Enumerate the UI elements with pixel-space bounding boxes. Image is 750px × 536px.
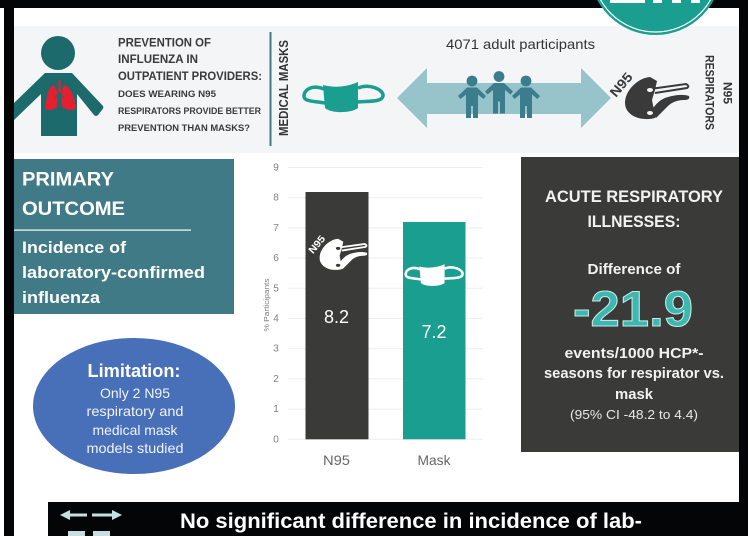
callout: limitation ellipse: models studied	[86, 440, 184, 456]
icon: medical mask	[304, 82, 383, 112]
panel: acute respiratory illnesses: ACUTE RESPIRATORY	[545, 188, 723, 206]
bar chart: percent participants: 5	[273, 283, 279, 294]
bar: mask	[403, 222, 466, 439]
panel: primary outcome	[14, 159, 234, 314]
text: outcome description	[22, 238, 205, 307]
text: outcome description: Incidence of	[22, 238, 126, 257]
icon: white N95 on bar	[307, 233, 367, 270]
heading: study question: PREVENTION OF	[118, 36, 211, 50]
bar chart: percent participants: 0	[273, 434, 279, 445]
heading: study question: INFLUENZA IN	[118, 52, 198, 66]
heading: primary outcome: OUTCOME	[22, 199, 125, 220]
callout: limitation ellipse: respiratory and	[86, 403, 184, 419]
label: medical masks: MEDICAL MASKS	[277, 40, 291, 136]
bar chart: percent participants: 3	[273, 344, 279, 355]
heading: primary outcome	[22, 170, 125, 220]
bar chart: percent participants: 1	[273, 404, 279, 415]
bar chart: percent participants: 6	[273, 253, 279, 264]
panel: acute respiratory illnesses: ILLNESSES:	[588, 213, 680, 231]
panel: acute respiratory illnesses: seasons for respirator vs.	[544, 366, 724, 382]
text: outcome description: influenza	[22, 288, 101, 307]
bar chart: percent participants: 4	[273, 314, 279, 324]
big number: -21.9	[573, 281, 693, 337]
callout: limitation ellipse	[33, 338, 235, 474]
bar chart: percent participants: 7	[273, 223, 279, 234]
bar chart: percent participants: Mask	[418, 452, 451, 468]
callout: limitation ellipse: medical mask	[92, 422, 178, 438]
label: participants: 4071 adult participants	[446, 36, 595, 52]
text: conclusion: No significant difference in incidence of lab-	[180, 510, 642, 533]
bar chart: percent participants: 9	[273, 162, 279, 174]
icon: N95 respirator: N95	[607, 69, 636, 100]
value: 7.2: 7.2	[421, 322, 447, 342]
panel: acute respiratory illnesses	[521, 157, 739, 452]
bar chart: percent participants: N95	[323, 452, 350, 468]
callout: limitation ellipse: Limitation:	[88, 360, 180, 381]
callout: limitation ellipse: Only 2 N95	[100, 385, 170, 401]
heading: study question: OUTPATIENT PROVIDERS:	[118, 69, 262, 83]
label: N95 respirators: N95	[720, 82, 732, 105]
bar chart: percent participants: 8	[273, 193, 279, 204]
label: N95 respirators: RESPIRATORS	[702, 55, 714, 130]
icon: three people	[458, 71, 540, 118]
icon: person with lungs	[14, 36, 103, 136]
bar chart: percent participants	[262, 162, 483, 468]
panel: acute respiratory illnesses: events/1000 HCP*-	[564, 346, 704, 362]
bar chart: percent participants: 2	[273, 374, 279, 385]
heading: study question: RESPIRATORS PROVIDE BETTER	[118, 106, 261, 117]
heading: study question	[118, 36, 262, 134]
divider line	[270, 32, 272, 146]
icon: white mask on bar	[406, 264, 463, 286]
value: 8.2: 8.2	[324, 307, 349, 327]
heading: study question: PREVENTION THAN MASKS?	[118, 123, 250, 134]
panel: acute respiratory illnesses: Difference of	[588, 262, 681, 278]
icon: N95 respirator	[607, 69, 689, 119]
text: outcome description: laboratory-confirmed	[22, 263, 205, 282]
icon: white N95 on bar: N95	[307, 233, 328, 256]
heading: study question: DOES WEARING N95	[118, 89, 217, 100]
heading: primary outcome: PRIMARY	[22, 170, 114, 190]
panel: acute respiratory illnesses: mask	[615, 387, 654, 403]
label: N95 respirators	[702, 55, 732, 130]
badge: journal logo circle	[590, 0, 722, 35]
bar: N95	[306, 192, 368, 439]
bar chart: percent participants: % Participants	[262, 278, 271, 332]
arrow: double-headed randomisation arrow	[397, 68, 611, 128]
icon: arrows apart	[60, 510, 122, 536]
panel: acute respiratory illnesses: (95% CI -48.2 to 4.4)	[570, 407, 698, 422]
panel: conclusion banner	[48, 502, 748, 536]
panel: study design background	[14, 26, 739, 153]
